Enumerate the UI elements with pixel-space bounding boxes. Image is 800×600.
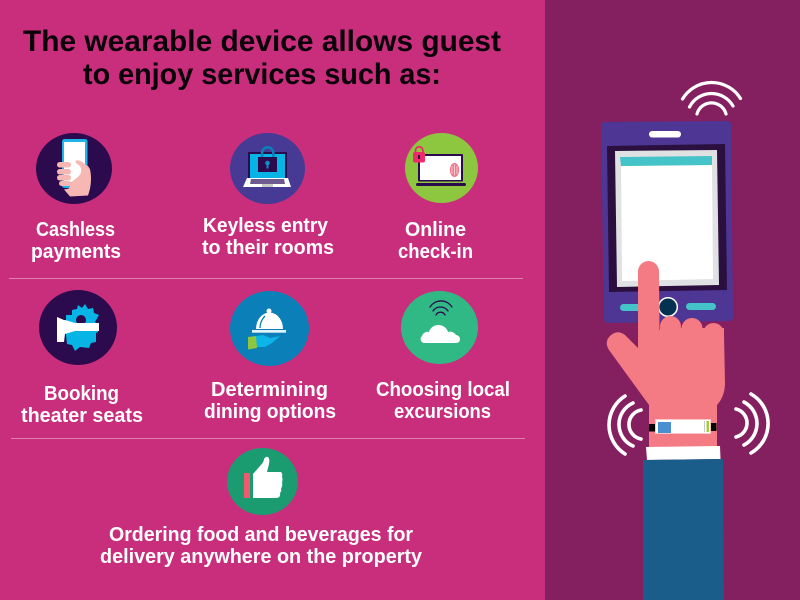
jacket sleeve bbox=[643, 459, 724, 600]
label: ordering food and beverages bbox=[100, 524, 423, 568]
label: ordering food and beverages: Ordering food and beverages for bbox=[109, 524, 413, 546]
wristband bbox=[649, 420, 716, 434]
icon: phone in hand bbox=[36, 133, 112, 204]
label: online check-in bbox=[398, 219, 473, 263]
icon: cloud with wifi bbox=[401, 291, 478, 364]
panel: dining options bbox=[204, 291, 336, 423]
label: local excursions bbox=[376, 379, 510, 423]
panel: keyless entry bbox=[202, 133, 334, 259]
icon: laptop with fingerprint bbox=[405, 133, 478, 203]
panel: online check-in bbox=[398, 133, 478, 263]
label: dining options: Determining bbox=[211, 379, 328, 401]
panel: booking theater seats bbox=[21, 290, 143, 427]
panel: ordering food and beverages bbox=[100, 448, 423, 568]
icon: left vibration waves bbox=[609, 396, 641, 454]
label: local excursions: Choosing local bbox=[376, 379, 510, 401]
label: online check-in: Online bbox=[405, 219, 466, 241]
icon: right vibration waves bbox=[736, 394, 768, 453]
icon: laptop with lock bbox=[230, 133, 305, 204]
label: keyless entry: to their rooms bbox=[202, 237, 334, 259]
icon: thumbs up bbox=[227, 448, 298, 515]
label: keyless entry: Keyless entry bbox=[203, 215, 329, 237]
label: booking theater seats bbox=[21, 383, 143, 427]
sleeve cuff bbox=[646, 446, 720, 460]
label: dining options: dining options bbox=[204, 401, 336, 423]
panel: local excursions bbox=[376, 291, 510, 423]
label: booking theater seats: Booking bbox=[44, 383, 119, 405]
icon: head with gear and hand bbox=[39, 290, 117, 365]
label: cashless payments: payments bbox=[31, 241, 121, 263]
icon: wifi signal above phone bbox=[682, 82, 740, 114]
icon: serving cloche on hand bbox=[230, 291, 309, 366]
panel: cashless payments bbox=[31, 133, 121, 263]
label: dining options bbox=[204, 379, 336, 423]
panel: right background bbox=[545, 0, 800, 600]
label: booking theater seats: theater seats bbox=[21, 405, 143, 427]
label: cashless payments bbox=[31, 219, 121, 263]
label: cashless payments: Cashless bbox=[36, 219, 115, 241]
smartphone bbox=[601, 121, 733, 323]
label: local excursions: excursions bbox=[394, 401, 491, 423]
hand pointing at phone bbox=[607, 261, 725, 447]
title: to enjoy services such as: bbox=[83, 58, 441, 91]
label: online check-in: check-in bbox=[398, 241, 473, 263]
title bbox=[23, 25, 501, 91]
title: The wearable device allows guest bbox=[23, 25, 501, 58]
label: ordering food and beverages: delivery anywhere on the property bbox=[100, 546, 423, 568]
label: keyless entry bbox=[202, 215, 334, 259]
